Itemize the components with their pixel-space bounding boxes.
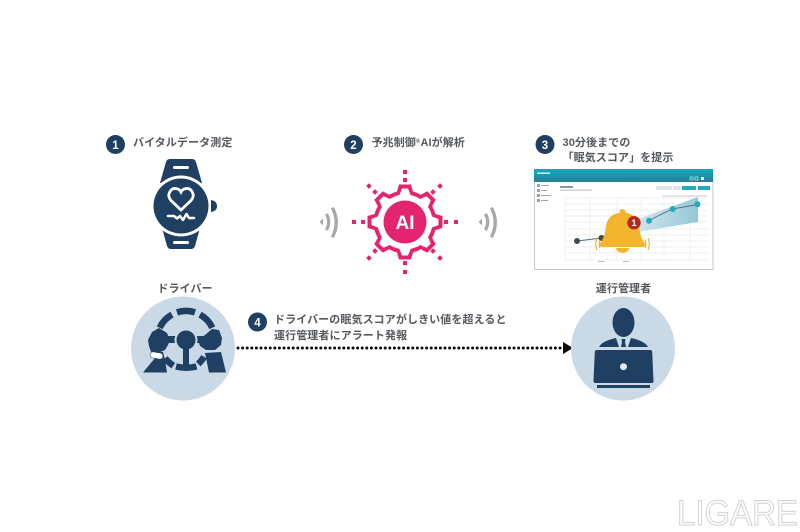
- forecast band: [638, 197, 698, 232]
- person: [612, 308, 634, 337]
- step 3 heading: [536, 135, 674, 164]
- step 2 heading: 2: [350, 140, 357, 152]
- icon: signal waves right: [478, 209, 495, 236]
- label: operations manager: 運行管理者: [596, 281, 651, 295]
- chart grid: [565, 198, 708, 260]
- dashboard sidebar: [537, 184, 551, 202]
- step 4 text with badge: ドライバーの眠気スコアがしきい値を超えると: [274, 312, 507, 326]
- step 1 heading: バイタルデータ測定: [133, 135, 232, 149]
- step 3 heading: 3: [542, 140, 548, 152]
- step 2 heading: AIが解析: [420, 135, 465, 149]
- label: driver: ドライバー: [157, 282, 213, 295]
- manager circle with person and laptop: [571, 296, 675, 400]
- step 2 heading: [344, 135, 465, 154]
- left hand and arm: [148, 328, 170, 353]
- laptop: [594, 350, 654, 383]
- steering wheel: [160, 311, 212, 368]
- driver circle with steering wheel: [131, 296, 235, 400]
- step 3 heading: 「眠気スコア」を提示: [562, 150, 674, 164]
- dashboard screenshot: [534, 169, 713, 270]
- icon: AI gear: AI: [396, 213, 414, 234]
- step 4 text with badge: [248, 312, 507, 342]
- score line: [577, 204, 698, 241]
- icon: smartwatch: [150, 159, 217, 249]
- step 1 heading: 1: [112, 140, 119, 152]
- bell alert: 1: [631, 218, 637, 229]
- wristband: [150, 351, 163, 360]
- icon: AI gear: [352, 170, 458, 274]
- step 2 heading: 予兆制御: [372, 137, 416, 149]
- dashboard header: [534, 169, 713, 182]
- arrow: dotted driver to manager: [238, 342, 573, 354]
- bell alert: [596, 209, 649, 253]
- step 4 text with badge: 運行管理者にアラート発報: [274, 328, 407, 342]
- icon: signal waves left: [320, 209, 336, 236]
- step 3 heading: 30分後までの: [562, 135, 630, 149]
- step 4 text with badge: 4: [254, 318, 261, 330]
- step 2 heading: ®: [416, 138, 421, 145]
- right hand and arm: [198, 329, 222, 350]
- step 1 heading: [106, 135, 232, 154]
